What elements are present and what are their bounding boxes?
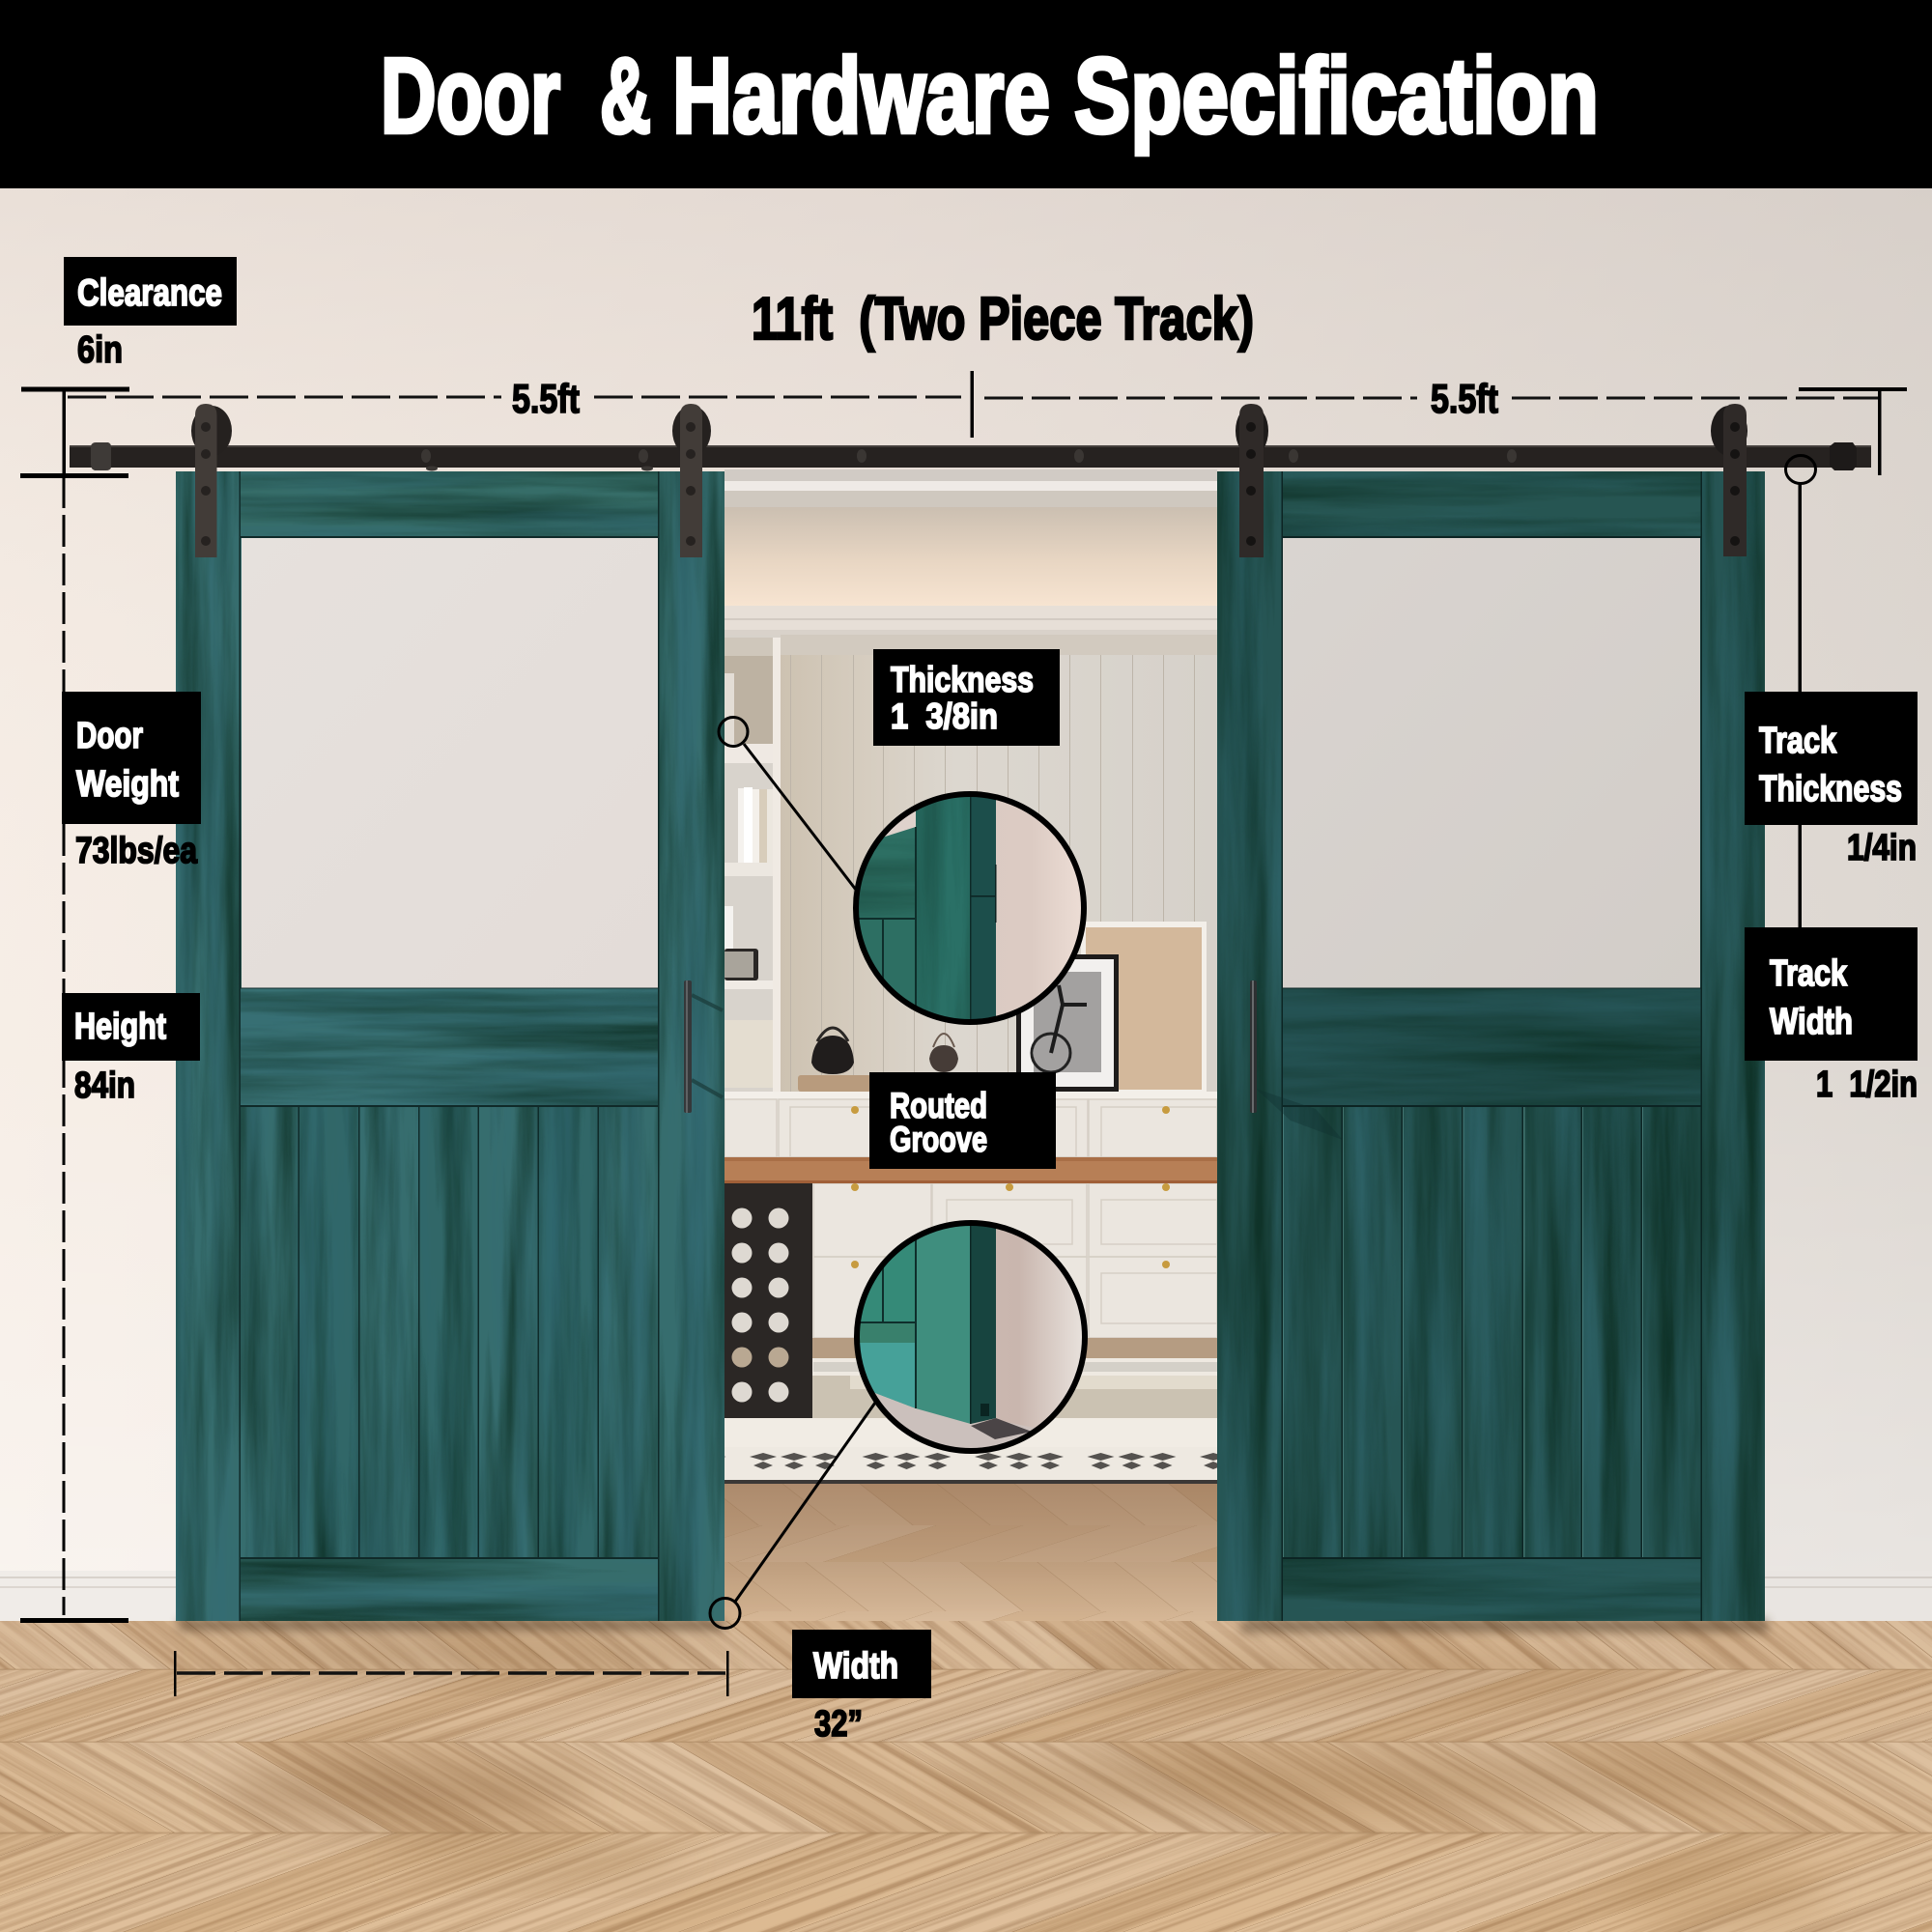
title (381, 37, 1599, 156)
magnified door bottom edge (850, 1217, 1092, 1459)
right door bottom rail (1282, 1558, 1701, 1621)
thickness label (873, 649, 1060, 746)
right door top rail (1282, 471, 1701, 537)
track thickness label: Track (1759, 721, 1837, 761)
room seen through the doorway (724, 469, 1217, 1621)
baseboard (0, 1571, 1932, 1621)
thickness leader (719, 717, 856, 890)
height label (62, 993, 200, 1061)
left barn door (176, 471, 724, 1621)
left door middle rail (240, 988, 659, 1105)
door height dimension (20, 476, 128, 1623)
clearance label (64, 257, 237, 326)
centre tick (970, 371, 974, 438)
dimension: track half span left: 5.5ft (512, 376, 580, 421)
bookshelf (724, 638, 781, 1092)
routed groove label: Groove (890, 1120, 987, 1159)
hanger strap 3 (1236, 404, 1268, 557)
door shadows on floor (179, 1619, 1768, 1633)
right barn door (1217, 471, 1765, 1621)
strip of floor and patterned rug (724, 1338, 1217, 1484)
width value: 32” (814, 1704, 863, 1745)
clearance bracket (20, 386, 129, 478)
framed art and photo (1016, 922, 1207, 1092)
routed groove leader (710, 1403, 875, 1629)
thickness label: 1 3/8in (891, 696, 998, 736)
left door plank tint variation (299, 1107, 598, 1557)
right door window panel (1283, 537, 1700, 988)
left door window panel (242, 537, 659, 988)
track length heading: 11ft (Two Piece Track) (752, 286, 1254, 353)
track mounting bolts (421, 449, 1517, 471)
track end stop right (1830, 442, 1857, 470)
height value: 84in (74, 1065, 135, 1106)
track end stop left (91, 442, 111, 470)
track width label: Track (1770, 953, 1848, 994)
right door groove highlights (1283, 1107, 1643, 1557)
right door handle (1250, 980, 1343, 1140)
door weight label: Door (76, 716, 143, 756)
hanger strap 4 (1711, 404, 1747, 556)
hanger strap 2 (672, 404, 711, 557)
title: & (600, 37, 651, 156)
track thickness label (1745, 692, 1918, 825)
right end bracket (1799, 387, 1907, 475)
clearance value: 6in (77, 329, 123, 371)
magnified door top edge (850, 787, 1092, 1030)
left door handle (684, 980, 723, 1113)
right door middle rail (1282, 988, 1701, 1105)
track width label (1745, 927, 1918, 1061)
teapot and kettle on counter (798, 1028, 958, 1092)
door weight value: 73lbs/ea (75, 831, 198, 871)
kitchen cabinets (724, 1092, 1217, 1338)
title: Hardware (672, 37, 1050, 156)
routed groove label: Routed (890, 1086, 987, 1125)
wall panelling (781, 635, 1217, 1092)
perforated black table leg (724, 1183, 812, 1418)
routed groove label (869, 1072, 1056, 1169)
dimension: track half span right: 5.5ft (1431, 376, 1498, 421)
thickness label: Thickness (891, 660, 1034, 699)
wooden countertop (724, 1157, 1217, 1183)
width label: Width (813, 1646, 898, 1687)
main header bar (0, 0, 1932, 188)
wall background (0, 188, 1932, 1628)
interior wood floor (724, 1484, 1217, 1621)
left door bottom rail (240, 1558, 659, 1621)
black sliding track (70, 442, 1871, 471)
height label: Height (74, 1007, 166, 1047)
title: Door (381, 37, 560, 156)
door width dimension (174, 1651, 728, 1696)
track leader line (1785, 456, 1816, 929)
door weight label: Weight (76, 764, 179, 805)
width label (792, 1630, 931, 1698)
door weight label (62, 692, 201, 824)
track width label: Width (1770, 1002, 1853, 1042)
title: Specification (1074, 37, 1599, 156)
right door plank grooves and frame lines (1281, 471, 1702, 1621)
left door plank grooves and frame lines (240, 471, 659, 1621)
clearance label: Clearance (77, 272, 222, 314)
hanger strap 1 (191, 404, 232, 557)
left door top rail (240, 471, 659, 537)
herringbone wood floor (0, 1621, 1932, 1932)
track thickness value: 1/4in (1847, 828, 1917, 868)
